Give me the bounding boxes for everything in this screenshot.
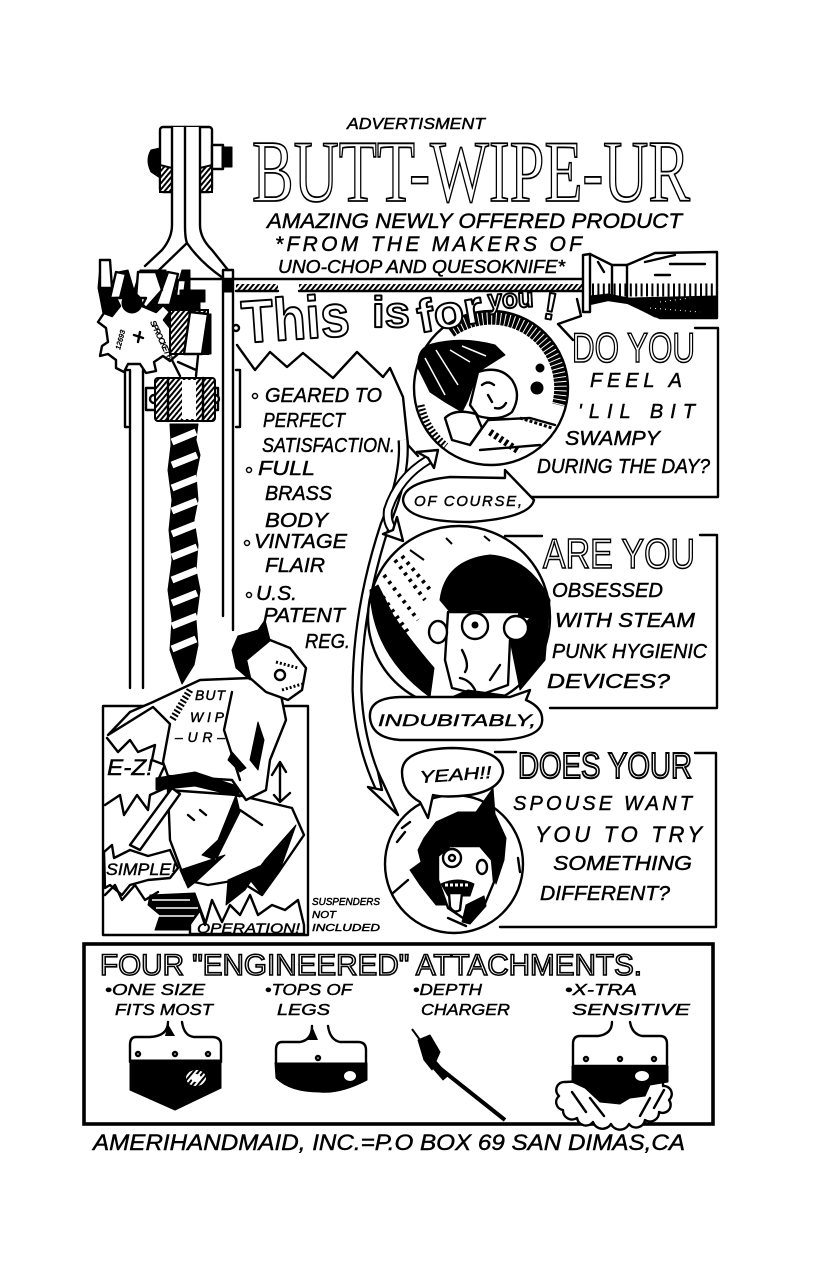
figure: belt — [156, 772, 240, 797]
note: suspenders not included: NOT — [312, 910, 337, 921]
note: suspenders not included: SUSPENDERS — [312, 897, 380, 908]
panel: does your spouse: SPOUSE WANT — [513, 793, 694, 815]
heading: this is for you — [239, 280, 560, 356]
panel: are you obsessed: DEVICES? — [547, 671, 671, 693]
burst: operation — [190, 895, 304, 936]
double arrow — [272, 762, 290, 802]
speech bubble: indubitably — [370, 690, 542, 740]
geared teeth — [98, 260, 200, 340]
panel: are you obsessed: ARE YOU — [543, 530, 695, 577]
heading: this is for you: ! — [540, 286, 560, 329]
panel: are you obsessed — [505, 530, 717, 708]
clevis bracket and bolt — [145, 127, 232, 278]
panel: do you feel swampy: DO YOU — [572, 324, 695, 371]
bullet list: features: BODY — [265, 510, 330, 532]
bullet list: features: U.S. — [256, 583, 297, 605]
figure: shirt and arm: –UR– — [174, 729, 225, 745]
bullet list: features: REG. — [305, 631, 350, 653]
clamp block — [146, 378, 219, 421]
panel: does your spouse: DIFFERENT? — [540, 883, 671, 905]
panel: four engineered attachments — [84, 944, 713, 1130]
bullet list: features: SATISFACTION. — [262, 435, 395, 457]
bullet list: features: VINTAGE — [254, 531, 348, 553]
heading: this is for you: for — [413, 280, 487, 343]
subtitle text block: UNO-CHOP AND QUESOKNIFE* — [278, 257, 566, 277]
panel: do you feel swampy: SWAMPY — [565, 428, 662, 450]
bullet list: features: PATENT — [263, 605, 347, 627]
burst: simple — [104, 845, 178, 900]
attachment: tops of legs: •TOPS OF — [265, 982, 353, 999]
burst: simple: SIMPLE! — [106, 860, 176, 879]
figure: shirt and arm: BUT — [195, 687, 226, 703]
panel: does your spouse: DOES YOUR — [518, 745, 692, 786]
panel: do you feel swampy: DURING THE DAY? — [537, 456, 711, 478]
speech bubble: yeah — [402, 748, 503, 818]
panel: do you feel swampy: FEEL A — [590, 370, 682, 392]
panel: does your spouse: SOMETHING — [553, 853, 692, 875]
sprocket gear: 12693 — [115, 329, 127, 351]
drive screw — [168, 356, 200, 684]
bullet list: features: PERFECT — [263, 410, 347, 432]
portrait: swampy woman — [414, 311, 568, 465]
portrait: surprised spouse — [385, 788, 523, 933]
portrait: obsessed man with glasses — [368, 526, 550, 709]
attachment: x-tra sensitive: SENSITIVE — [572, 1002, 690, 1019]
heading: this is for you: is — [372, 288, 410, 337]
device on hip — [130, 788, 180, 850]
horizontal rod — [190, 279, 588, 291]
heading: advertisment: ADVERTISMENT — [346, 116, 486, 133]
panel: figure with device — [103, 620, 308, 936]
note: suspenders not included — [312, 897, 380, 934]
bullet list: features: GEARED TO — [265, 385, 382, 407]
attachment: one size fits most — [105, 982, 221, 1110]
panel: do you feel swampy: 'LIL BIT — [578, 401, 697, 423]
attachment: x-tra sensitive: •X-TRA — [565, 982, 637, 999]
bullet list: features: BRASS — [265, 483, 333, 505]
burst: operation: OPERATION! — [197, 920, 300, 936]
vertical frame rails — [125, 270, 240, 688]
attachment: depth charger: •DEPTH — [413, 982, 483, 999]
bullet list: features: FLAIR — [265, 555, 325, 577]
figure: shirt and arm: WIP — [190, 709, 225, 725]
panel: are you obsessed: WITH STEAM — [555, 610, 695, 632]
footer: company address: AMERIHANDMAID, INC.=P.O BOX 69 SAN DIMAS,CA — [91, 1130, 685, 1155]
clamp wedge — [170, 290, 211, 354]
illustration: steam punk machine — [98, 127, 588, 688]
attachment: depth charger: CHARGER — [421, 1002, 510, 1019]
burst: e-z — [105, 738, 172, 815]
panel: are you obsessed: PUNK HYGIENIC — [552, 641, 708, 663]
bullet list: features: FULL — [258, 458, 315, 480]
panel: does your spouse: YOU TO TRY — [535, 822, 703, 847]
panel: do you feel swampy — [520, 324, 718, 497]
attachment: one size fits most: FITS MOST — [115, 1002, 214, 1019]
panel: does your spouse — [495, 745, 716, 927]
heading: attachments: FOUR "ENGINEERED" ATTACHMENTS. — [100, 949, 642, 982]
bullet list: features — [244, 385, 395, 653]
figure: shirt and arm — [108, 678, 286, 800]
speech bubble: of course — [403, 470, 534, 522]
heading: this is for you: This — [239, 282, 352, 356]
callout: burst outline and arrows — [237, 299, 581, 815]
note: suspenders not included: INCLUDED — [312, 923, 380, 934]
subtitle text block — [265, 210, 684, 277]
attachment: x-tra sensitive — [556, 982, 690, 1130]
speech bubble: indubitably: INDUBITABLY, — [378, 711, 536, 730]
speech bubble: yeah: YEAH!! — [419, 763, 492, 787]
panel: are you obsessed: OBSESSED — [552, 580, 663, 602]
attachment: tops of legs: LEGS — [277, 1002, 330, 1019]
figure: pants and boots — [148, 790, 304, 930]
sprocket gear: SPROCKET 6 — [148, 319, 174, 361]
attachment: one size fits most: •ONE SIZE — [105, 982, 205, 999]
illustration: handle — [583, 252, 717, 318]
subtitle text block: *FROM THE MAKERS OF — [275, 233, 583, 256]
sprocket gear — [98, 293, 180, 373]
figure: head — [232, 620, 306, 700]
burst: e-z: E-Z! — [107, 755, 153, 780]
attachment: depth charger — [412, 982, 510, 1120]
speech bubble: of course: OF COURSE, — [414, 493, 522, 510]
attachment: tops of legs — [265, 982, 367, 1092]
heading: this is for you: you — [487, 283, 534, 315]
subtitle text block: AMAZING NEWLY OFFERED PRODUCT — [265, 210, 684, 233]
